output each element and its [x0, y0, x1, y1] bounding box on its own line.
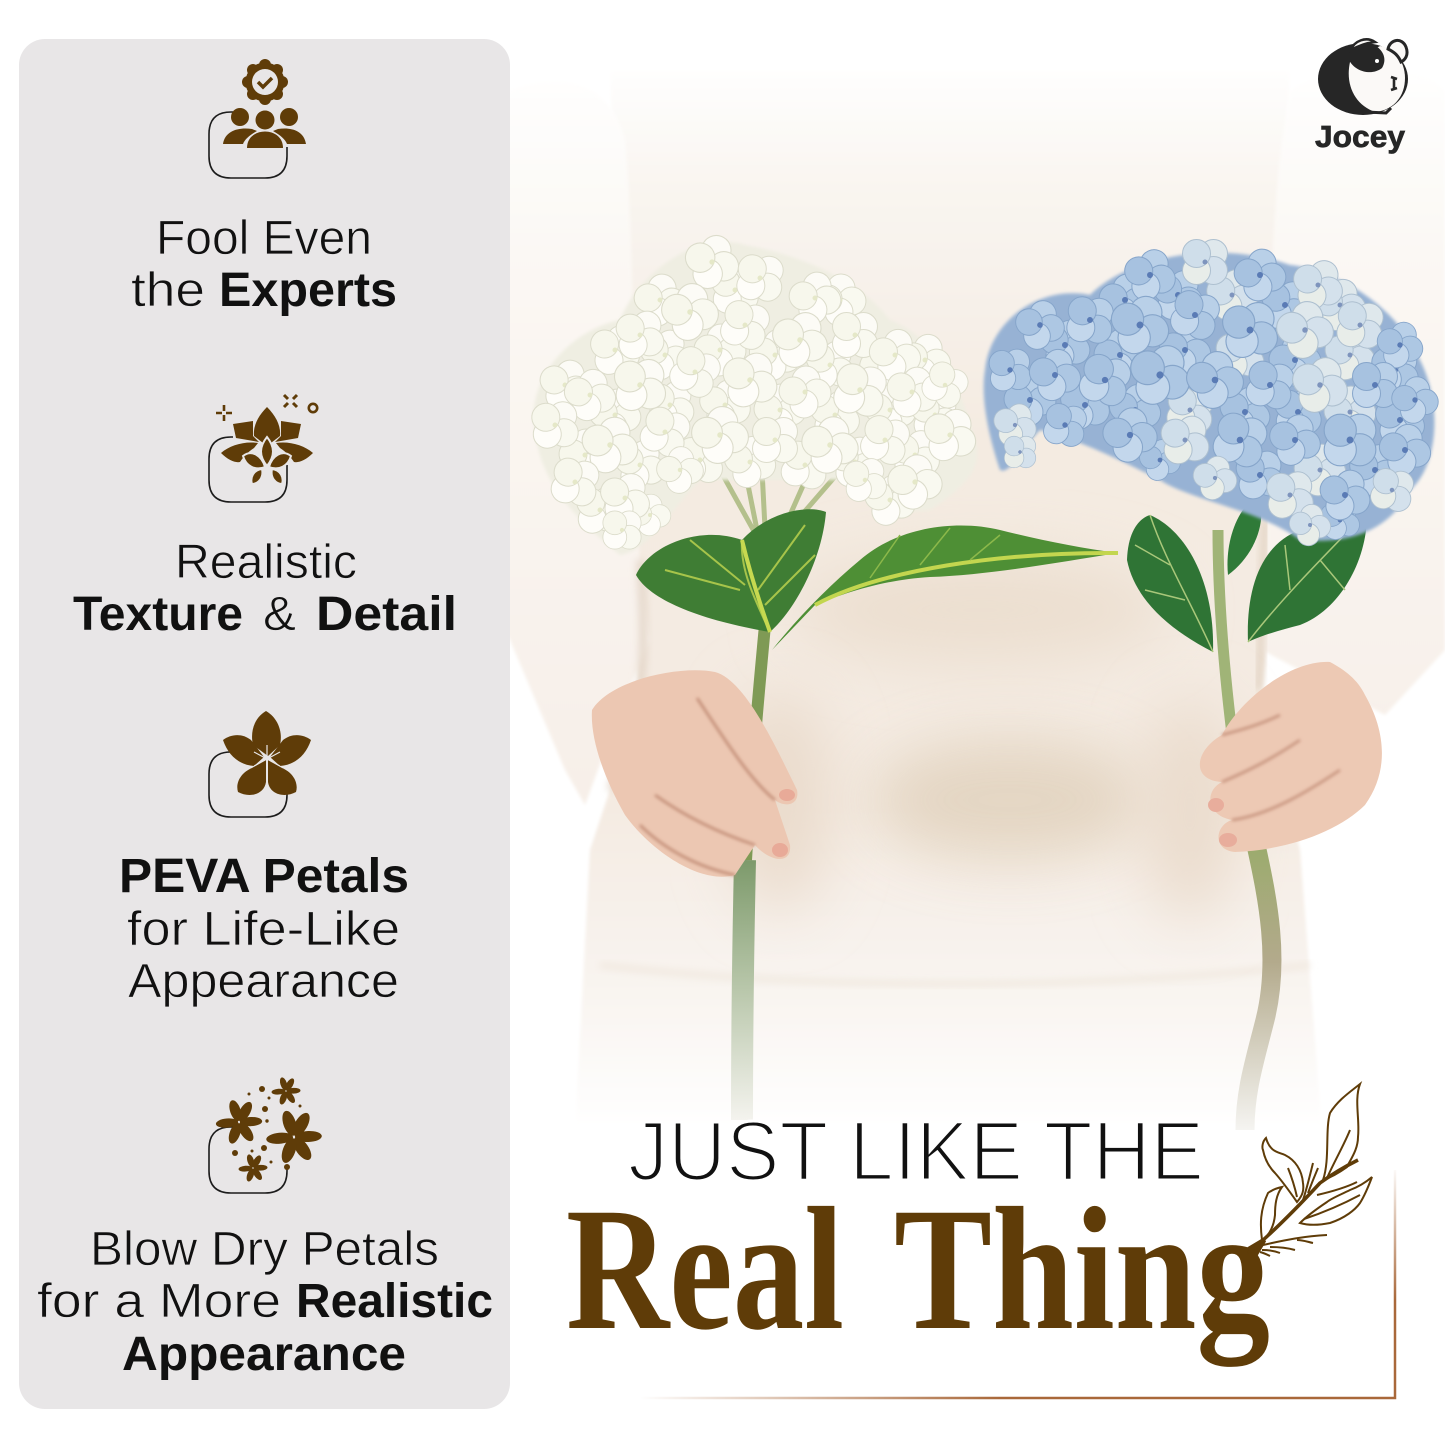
- leaf: left heart leaf: [636, 509, 826, 632]
- text: realistic texture and detail: Realistic: [175, 536, 357, 589]
- guinea pig mark: [1318, 39, 1408, 115]
- leaf: right flower right leaf: [1248, 512, 1367, 642]
- photo: woman holding two hydrangeas: [412, 68, 1445, 1130]
- torso in cream dress: [575, 70, 1322, 1130]
- title line 2: Thing: Thing: [894, 1172, 1270, 1367]
- text: realistic texture and detail: [73, 536, 457, 641]
- flower base: [984, 253, 1434, 541]
- text: blow dry petals: Blow Dry Petals: [90, 1223, 439, 1276]
- right stem lower: [1245, 845, 1272, 1130]
- left hand: [592, 670, 797, 877]
- text: peva petals for life-like appearance: [119, 850, 409, 1008]
- icon: scattered blossoms: [209, 1076, 322, 1193]
- text: fool even the experts: [131, 212, 397, 317]
- white hydrangea: [518, 227, 987, 561]
- frame corner: [640, 1170, 1395, 1398]
- side panel: [19, 39, 510, 1409]
- text: peva petals for life-like appearance: Appearance: [128, 955, 399, 1008]
- right stem: [1218, 530, 1234, 750]
- title block: [566, 1084, 1395, 1398]
- text: blow dry petals: Appearance: [122, 1328, 406, 1381]
- right sleeve: [1262, 68, 1445, 715]
- leaf: long left leaf: [772, 525, 1118, 650]
- leaf: right flower left leaf: [1127, 515, 1213, 652]
- right hand: [1200, 662, 1382, 852]
- title line 1: JUST LIKE THE: [628, 1104, 1204, 1198]
- florets top layer: [977, 225, 1442, 549]
- fabric shading: [600, 520, 1310, 984]
- text: blow dry petals: [37, 1223, 493, 1381]
- text: fool even the experts: the: [131, 264, 205, 317]
- left stem: [746, 625, 765, 860]
- blue hydrangea: [977, 225, 1442, 549]
- icon: five petal flower: [209, 711, 311, 817]
- florets under layer: [530, 253, 971, 547]
- text: fool even the experts: Experts: [219, 264, 397, 317]
- text: realistic texture and detail: Detail: [316, 588, 457, 641]
- title line 2: Real: Real: [566, 1172, 844, 1367]
- icon: lotus flower with sparkles: [209, 395, 317, 502]
- logo: Jocey guinea pig: [1315, 39, 1408, 154]
- flower base: [534, 242, 977, 555]
- text: peva petals for life-like appearance: PEVA Petals: [119, 850, 409, 903]
- left sleeve: [412, 81, 650, 805]
- wordmark: Jocey: [1315, 119, 1406, 154]
- panel background: [19, 39, 510, 1409]
- text: blow dry petals: Realistic: [296, 1275, 493, 1328]
- text: peva petals for life-like appearance: for Life-Like: [127, 903, 400, 956]
- florets under layer: [1002, 259, 1436, 548]
- icon: award badge over people: [209, 59, 306, 178]
- text: blow dry petals: for a More: [37, 1275, 281, 1328]
- left stem lower: [742, 860, 745, 1120]
- florets top layer: [518, 227, 987, 561]
- text: realistic texture and detail: Texture: [73, 588, 243, 641]
- icon: leaf sprig: [1248, 1084, 1372, 1256]
- text: fool even the experts: Fool Even: [156, 212, 372, 265]
- text: realistic texture and detail: &: [263, 588, 296, 641]
- white flower stems: [720, 465, 845, 625]
- leaf: small center leaf: [1227, 495, 1261, 575]
